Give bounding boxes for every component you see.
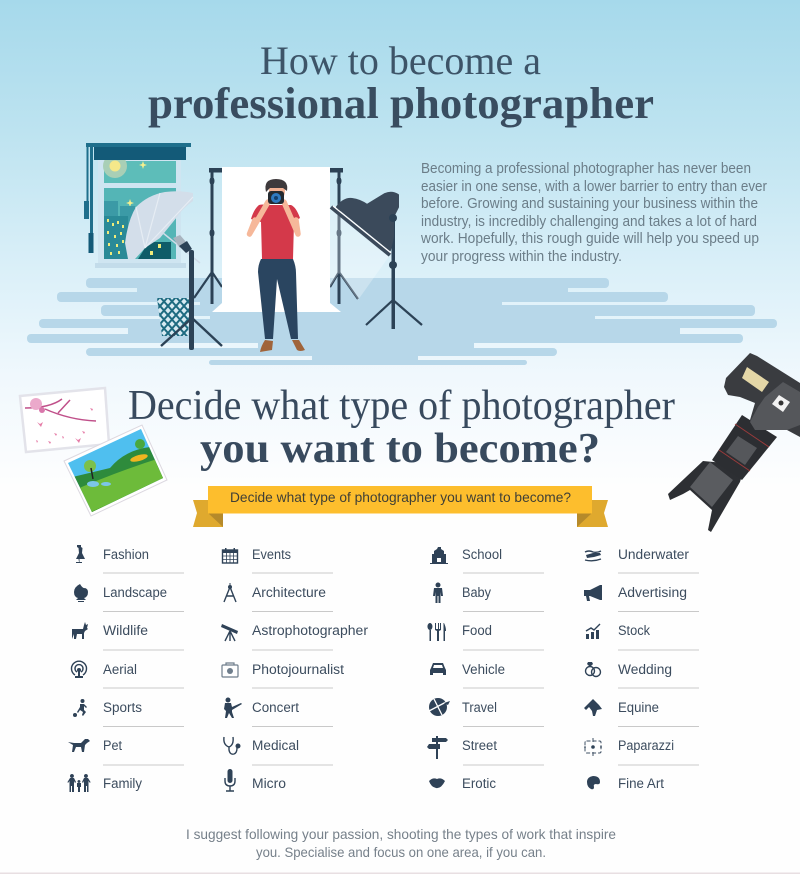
list item: Street xyxy=(427,736,497,759)
list item: Architecture xyxy=(224,583,326,602)
list item: Advertising xyxy=(584,585,687,601)
umbrella light xyxy=(125,191,200,350)
list item: Wedding: Wedding xyxy=(618,662,672,677)
intro paragraph: work. Hopefully, this rough guide will help you speed up xyxy=(420,231,759,247)
light stand legs xyxy=(161,318,222,346)
list item: Fashion: Fashion xyxy=(103,547,149,562)
list item: Concert xyxy=(224,698,299,718)
camera with lens xyxy=(668,353,800,532)
list item: Pet: Pet xyxy=(103,738,122,753)
banner: Decide what type of photographer you want to become? xyxy=(230,489,571,505)
closing note: you. Specialise and focus on one area, if you can. xyxy=(256,844,546,860)
white backdrop xyxy=(212,167,341,312)
list dividers xyxy=(103,573,699,765)
list item: Sports xyxy=(73,699,142,717)
list item: Stock: Stock xyxy=(618,623,650,638)
list item: Vehicle: Vehicle xyxy=(462,662,505,677)
softbox light xyxy=(331,193,422,329)
list item: Aerial: Aerial xyxy=(103,662,137,677)
list item: Wildlife xyxy=(72,622,148,639)
floor: layered strips xyxy=(27,278,777,365)
list item: Micro: Micro xyxy=(252,776,286,791)
intro paragraph: Becoming a professional photographer has never been xyxy=(421,161,751,177)
intro paragraph xyxy=(420,161,767,265)
closing note xyxy=(186,826,616,860)
list item: Stock xyxy=(586,623,650,639)
list item: Paparazzi: Paparazzi xyxy=(618,738,674,753)
intro paragraph: easier in one sense, with a lower barrier to entry than ever xyxy=(421,179,767,195)
list item: Underwater xyxy=(585,547,690,562)
list item: Street: Street xyxy=(462,738,497,753)
title xyxy=(148,38,654,128)
photo: green landscape xyxy=(64,424,168,516)
list item: Events xyxy=(222,547,291,563)
list item: Architecture: Architecture xyxy=(252,585,326,600)
intro paragraph: before. Growing and sustaining your business within the xyxy=(421,196,758,212)
intro paragraph: your progress within the industry. xyxy=(421,249,622,265)
softbox light beam xyxy=(330,207,390,300)
window xyxy=(95,154,186,268)
list item: Micro xyxy=(225,769,286,791)
list item: School: School xyxy=(462,547,502,562)
list item: Events: Events xyxy=(252,547,291,562)
list item: Wildlife: Wildlife xyxy=(103,623,148,638)
list item: Erotic: Erotic xyxy=(462,776,496,791)
list item: Equine: Equine xyxy=(618,700,659,715)
list item: Food xyxy=(427,623,492,641)
list item: Advertising: Advertising xyxy=(618,585,687,600)
list item: Pet xyxy=(68,738,122,753)
list item: Fine Art: Fine Art xyxy=(618,776,664,791)
list item: Landscape: Landscape xyxy=(103,585,167,600)
list item: Concert: Concert xyxy=(252,700,299,715)
title: professional photographer xyxy=(148,79,654,128)
list item: School xyxy=(430,547,502,564)
banner xyxy=(193,486,608,527)
list item: Vehicle xyxy=(430,662,505,677)
list item: Travel xyxy=(429,698,497,716)
window blind xyxy=(84,143,191,253)
list item: Family xyxy=(68,774,142,792)
list item: Food: Food xyxy=(462,623,492,638)
photographer xyxy=(250,179,305,352)
list item: Baby: Baby xyxy=(462,585,491,600)
list item: Photojournalist: Photojournalist xyxy=(252,662,344,677)
list item: Astrophotographer xyxy=(221,623,369,641)
section heading: Decide what type of photographer xyxy=(128,383,675,429)
list item: Erotic xyxy=(429,776,496,791)
list item: Fine Art xyxy=(587,776,664,791)
title: How to become a xyxy=(260,38,541,83)
list item: Wedding xyxy=(586,662,672,677)
list item: Baby xyxy=(433,582,491,603)
section heading xyxy=(128,383,675,472)
list item: Fashion xyxy=(76,545,149,563)
intro paragraph: industry, is incredibly challenging and takes a lot of hard xyxy=(421,214,757,230)
photo: cherry blossom xyxy=(20,388,109,452)
closing note: I suggest following your passion, shooting the types of work that inspire xyxy=(186,826,616,842)
list item: Paparazzi xyxy=(584,738,674,756)
backdrop stands xyxy=(194,168,358,304)
list item: Medical xyxy=(224,737,299,754)
section heading: you want to become? xyxy=(200,426,600,472)
list item: Travel: Travel xyxy=(462,700,497,715)
list item: Underwater: Underwater xyxy=(618,547,690,562)
illustration: photographer in studio xyxy=(84,143,422,352)
list item: Equine xyxy=(584,699,659,716)
list item: Family: Family xyxy=(103,776,142,791)
waste basket xyxy=(157,298,190,336)
list item: Astrophotographer: Astrophotographer xyxy=(252,623,369,638)
list item: Sports: Sports xyxy=(103,700,142,715)
list item: Aerial xyxy=(72,661,137,678)
list item: Landscape xyxy=(74,584,167,602)
list item: Medical: Medical xyxy=(252,738,299,753)
